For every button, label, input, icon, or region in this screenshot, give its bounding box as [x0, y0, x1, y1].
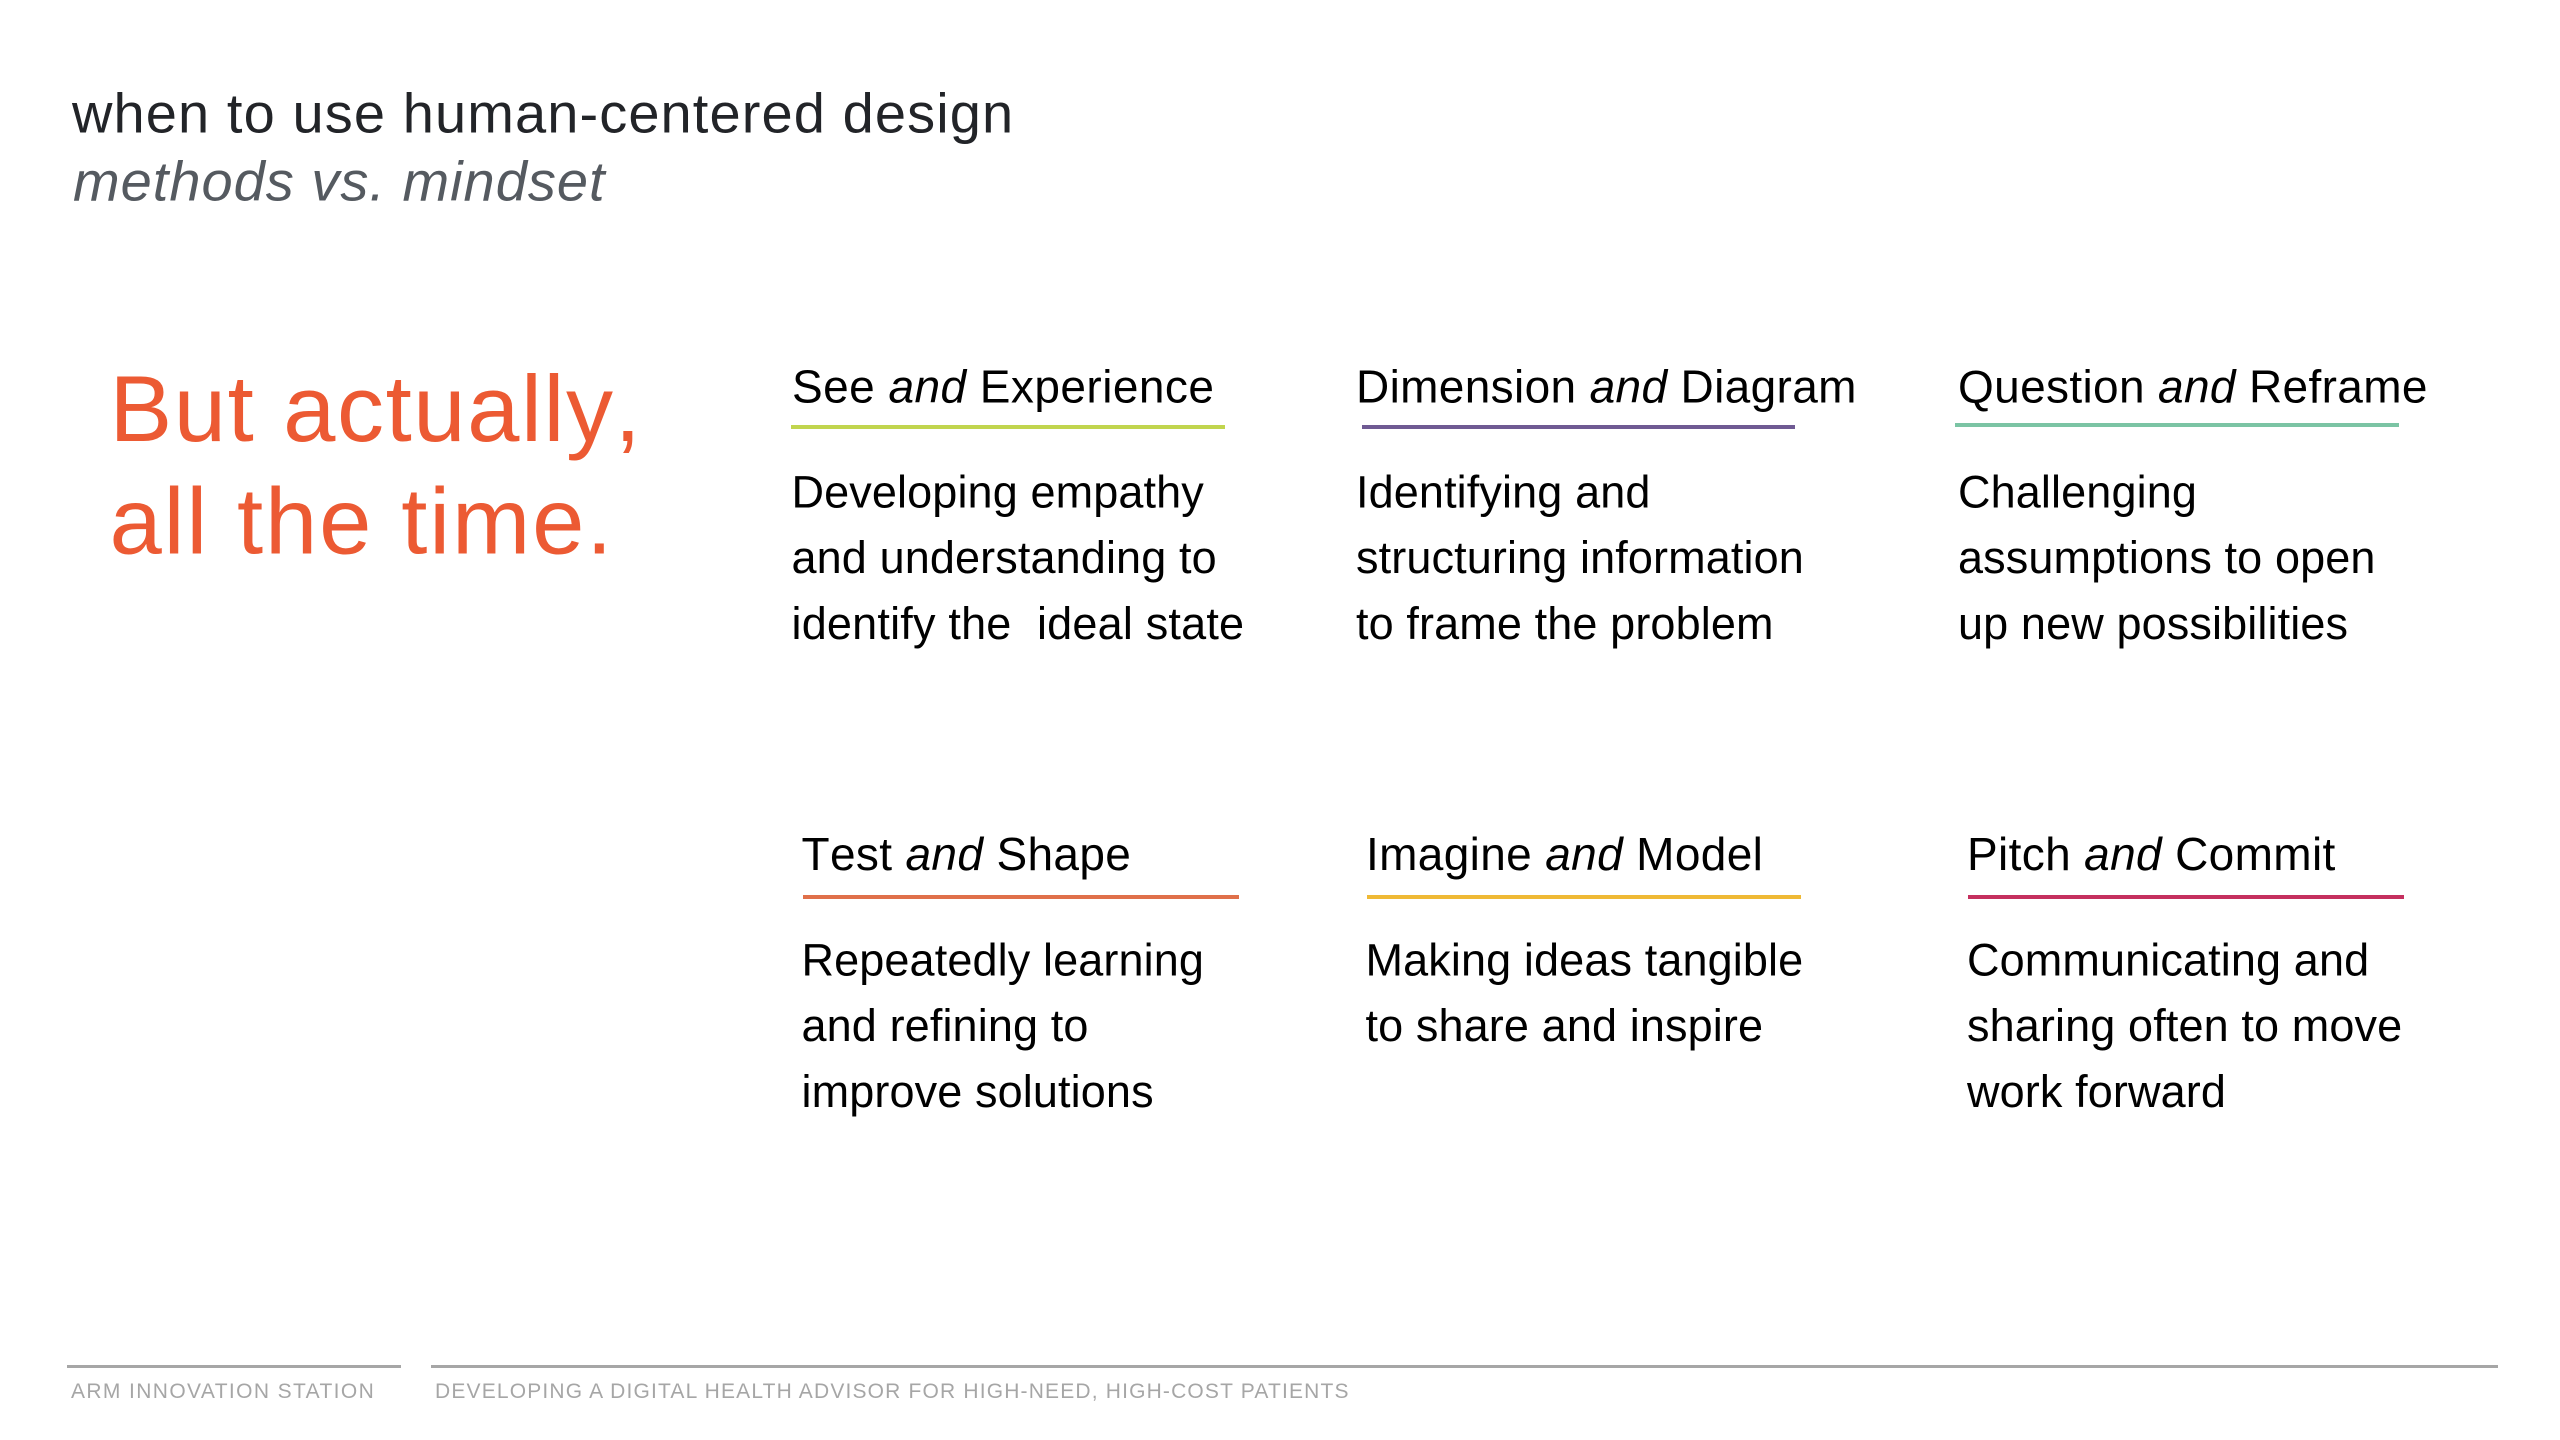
body text: Challenging: [1958, 467, 2197, 518]
footer left: ARM INNOVATION STATION: [71, 1380, 375, 1403]
body text: identify the ideal state: [792, 598, 1244, 649]
body text: [802, 935, 1204, 1117]
callout: But actually, all the time.: [110, 356, 642, 574]
body text: work forward: [1966, 1066, 2226, 1117]
body text: Repeatedly learning: [802, 935, 1204, 986]
panel: See and Experience: [791, 360, 1244, 649]
footer right: DEVELOPING A DIGITAL HEALTH ADVISOR FOR HIGH-NEED, HIGH-COST PATIENTS: [435, 1380, 1350, 1403]
body text: [1958, 467, 2376, 649]
callout: But actually, all the time.: But actually,: [110, 356, 642, 461]
body text: Making ideas tangible: [1366, 935, 1803, 986]
color rule: crimson: [1968, 895, 2404, 899]
body text: [792, 467, 1244, 649]
heading: Pitch and Commit: [1967, 828, 2336, 880]
body text: Communicating and: [1967, 935, 2369, 986]
body text: and understanding to: [792, 532, 1217, 583]
body text: sharing often to move: [1967, 1000, 2402, 1051]
body text: [1356, 467, 1804, 649]
body text: structuring information: [1356, 532, 1804, 583]
body text: and refining to: [802, 1000, 1089, 1051]
body text: to frame the problem: [1356, 598, 1774, 649]
footer left: [67, 1365, 401, 1403]
color rule: purple: [1362, 425, 1795, 429]
body text: [1966, 935, 2402, 1117]
panel: Question and Reframe: [1955, 360, 2428, 649]
color rule: lime: [791, 425, 1225, 429]
panel: Imagine and Model: [1366, 828, 1803, 1051]
panel: Test and Shape: [802, 828, 1239, 1117]
color rule: teal: [1955, 423, 2399, 427]
title: when to use human-centered design: [71, 82, 1014, 144]
heading: Imagine and Model: [1366, 828, 1763, 880]
panel: Dimension and Diagram: [1356, 360, 1857, 649]
body text: to share and inspire: [1366, 1000, 1763, 1051]
subtitle: methods vs. mindset: [73, 150, 607, 212]
body text: improve solutions: [802, 1066, 1154, 1117]
footer right: [431, 1365, 2498, 1403]
body text: assumptions to open: [1958, 532, 2376, 583]
heading: Question and Reframe: [1958, 360, 2428, 412]
panel: Pitch and Commit: [1966, 828, 2404, 1117]
body text: Developing empathy: [792, 467, 1204, 518]
color rule: yellow: [1367, 895, 1801, 899]
body text: up new possibilities: [1958, 598, 2348, 649]
body text: Identifying and: [1356, 467, 1651, 518]
color rule: orange: [803, 895, 1239, 899]
title: [71, 82, 1014, 212]
heading: Dimension and Diagram: [1356, 360, 1857, 412]
body text: [1366, 935, 1803, 1051]
heading: See and Experience: [792, 360, 1214, 412]
callout: But actually, all the time.: all the time.: [110, 468, 614, 574]
heading: Test and Shape: [802, 828, 1131, 880]
